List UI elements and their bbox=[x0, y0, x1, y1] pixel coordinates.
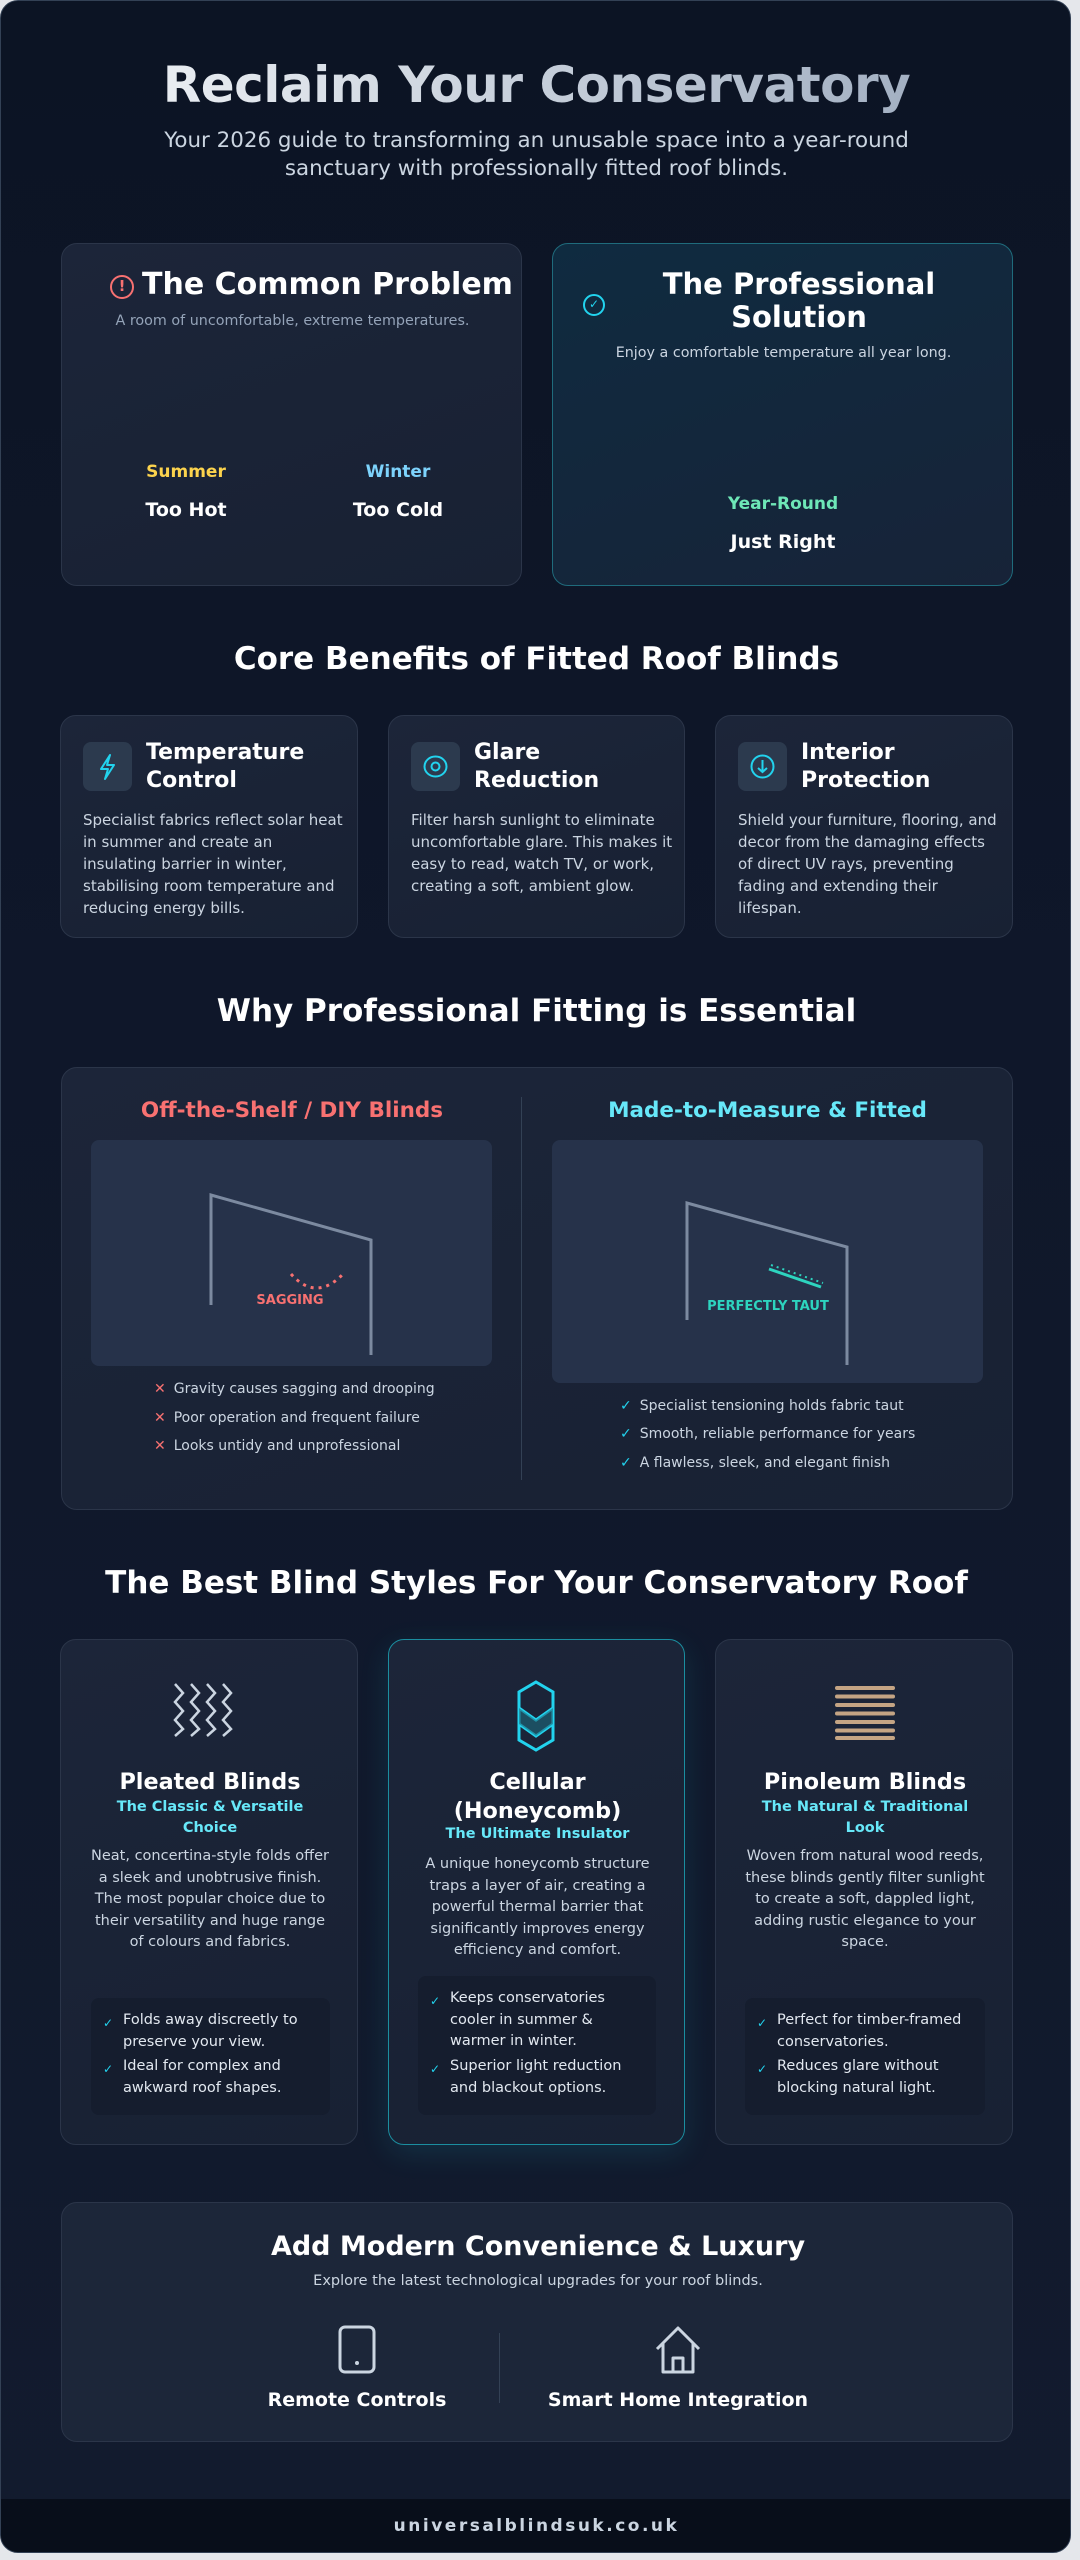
feature box bbox=[91, 1998, 330, 2115]
heading: best blind styles: The Best Blind Styles For Your Conservatory Roof bbox=[105, 1565, 968, 1601]
icon: check circle: ✓ bbox=[589, 297, 599, 311]
description: A unique honeycomb structure traps a layer of air, creating a powerful thermal barrier that significantly improves energy efficiency and comfort. bbox=[425, 1856, 650, 1958]
subtitle: Your 2026 guide to transforming an unusable space into a year-round sanctuary with professionally fitted roof blinds. bbox=[164, 128, 909, 181]
feature: remote controls: Remote Controls bbox=[268, 2389, 446, 2411]
feature box: Ideal for complex and awkward roof shapes. bbox=[123, 2058, 281, 2096]
list: fitted pros: ✓ Specialist tensioning holds fabric taut bbox=[620, 1398, 904, 1414]
feature box: ✓ bbox=[103, 2062, 113, 2076]
description: Shield your furniture, flooring, and decor from the damaging effects of direct UV rays, preventing fading and extending their lifespan. bbox=[738, 811, 997, 917]
diagram: taut: PERFECTLY TAUT bbox=[707, 1299, 829, 1314]
feature box: ✓ bbox=[430, 1994, 440, 2008]
title: Reclaim Your Conservatory bbox=[163, 56, 910, 114]
feature box: Superior light reduction and blackout options. bbox=[450, 2058, 621, 2096]
subtitle: The Classic & Versatile Choice bbox=[117, 1799, 303, 1836]
subtitle: Explore the latest technological upgrades for your roof blinds. bbox=[313, 2273, 763, 2289]
title: Glare bbox=[474, 740, 540, 765]
label: winter: Winter bbox=[366, 462, 430, 482]
feature box: ✓ bbox=[430, 2062, 440, 2076]
list: fitted pros bbox=[620, 1398, 915, 1471]
text: problem subtitle: A room of uncomfortable, extreme temperatures. bbox=[116, 313, 469, 329]
panel: modern convenience bbox=[61, 2202, 1013, 2442]
description: Neat, concertina-style folds offer a sleek and unobtrusive finish. The most popular choice due to their versatility and huge range of colours and fabrics. bbox=[91, 1848, 329, 1950]
text: solution subtitle: Enjoy a comfortable temperature all year long. bbox=[616, 345, 951, 361]
diagram: sagging: SAGGING bbox=[256, 1293, 324, 1308]
label: summer: Summer bbox=[146, 462, 226, 482]
diagram: sagging bbox=[91, 1140, 492, 1366]
feature box bbox=[418, 1976, 656, 2115]
feature box: ✓ bbox=[757, 2016, 767, 2030]
title: Protection bbox=[801, 768, 930, 793]
feature box bbox=[745, 1998, 985, 2115]
list: diy cons bbox=[154, 1381, 435, 1454]
icon: shield arrow bbox=[738, 742, 787, 791]
panel: pleated blinds bbox=[60, 1639, 358, 2145]
feature: remote controls bbox=[268, 2326, 446, 2411]
list: fitted pros: ✓ A flawless, sleek, and elegant finish bbox=[620, 1455, 890, 1471]
label: summer bbox=[145, 462, 227, 521]
feature box: Keeps conservatories cooler in summer & warmer in winter. bbox=[450, 1990, 605, 2049]
label: year-round bbox=[728, 494, 838, 553]
title bbox=[474, 740, 599, 793]
label: year-round: Just Right bbox=[731, 531, 835, 553]
diagram: taut bbox=[552, 1140, 983, 1383]
icon: house bbox=[656, 2326, 700, 2374]
list: diy cons: ✕ Gravity causes sagging and drooping bbox=[154, 1381, 435, 1397]
label: winter bbox=[352, 462, 443, 521]
heading: core benefits: Core Benefits of Fitted Roof Blinds bbox=[234, 641, 839, 677]
label: winter: Too Cold bbox=[353, 499, 443, 521]
heading: diy: Off-the-Shelf / DIY Blinds bbox=[141, 1098, 443, 1123]
heading: Add Modern Convenience & Luxury bbox=[271, 2231, 805, 2262]
panel: comparison bbox=[61, 1067, 1013, 1510]
list: diy cons: ✕ Poor operation and frequent failure bbox=[154, 1410, 420, 1426]
heading: common problem: ! bbox=[119, 277, 125, 295]
feature box: Folds away discreetly to preserve your view. bbox=[123, 2012, 298, 2050]
title: Pleated Blinds bbox=[119, 1769, 301, 1795]
title bbox=[146, 740, 304, 793]
feature box: Reduces glare without blocking natural light. bbox=[777, 2058, 939, 2096]
title: (Honeycomb) bbox=[454, 1798, 621, 1824]
panel: interior protection bbox=[715, 715, 1013, 938]
heading: solution: The Professional Solution bbox=[663, 267, 935, 334]
title: Pinoleum Blinds bbox=[764, 1769, 966, 1795]
feature box: Perfect for timber-framed conservatories. bbox=[777, 2012, 961, 2050]
footer: universalblindsuk.co.uk bbox=[394, 2516, 679, 2536]
description: Specialist fabrics reflect solar heat in summer and create an insulating barrier in winter, stabilising room temperature and reducing energy bills. bbox=[83, 811, 343, 917]
icon: pleats bbox=[173, 1683, 233, 1737]
panel: common problem bbox=[61, 243, 522, 586]
subtitle: The Natural & Traditional Look bbox=[762, 1799, 968, 1836]
title bbox=[454, 1769, 621, 1824]
title bbox=[801, 740, 930, 793]
label: year-round: Year-Round bbox=[728, 494, 838, 514]
list: diy cons: ✕ Looks untidy and unprofessional bbox=[154, 1438, 400, 1454]
title: Control bbox=[146, 768, 237, 793]
feature box: ✓ bbox=[757, 2062, 767, 2076]
title bbox=[1, 52, 1072, 118]
panel: temperature control bbox=[60, 715, 358, 938]
feature: smart home: Smart Home Integration bbox=[548, 2389, 808, 2411]
description: Filter harsh sunlight to eliminate uncomfortable glare. This makes it easy to read, watch TV, or work, creating a soft, ambient glow. bbox=[411, 811, 672, 895]
heading: why professional fitting: Why Professional Fitting is Essential bbox=[217, 993, 856, 1029]
icon: lightning bbox=[83, 742, 132, 791]
footer bbox=[1, 2499, 1072, 2555]
description: Woven from natural wood reeds, these blinds gently filter sunlight to create a soft, dappled light, adding rustic elegance to your space. bbox=[745, 1848, 985, 1950]
icon: wood slats bbox=[835, 1686, 895, 1740]
icon: honeycomb bbox=[518, 1680, 554, 1752]
panel: professional solution bbox=[552, 243, 1013, 586]
panel: glare reduction bbox=[388, 715, 685, 938]
title: Temperature bbox=[146, 740, 304, 765]
list: fitted pros: ✓ Smooth, reliable performance for years bbox=[620, 1426, 915, 1442]
heading: fitted: Made-to-Measure & Fitted bbox=[608, 1098, 927, 1123]
title: Cellular bbox=[489, 1769, 586, 1795]
icon: eye bbox=[411, 742, 460, 791]
icon: check circle bbox=[583, 294, 605, 316]
feature box: ✓ bbox=[103, 2016, 113, 2030]
feature: smart home bbox=[548, 2326, 808, 2411]
title: Interior bbox=[801, 740, 895, 765]
subtitle: The Ultimate Insulator bbox=[446, 1826, 629, 1842]
heading: common problem: The Common Problem bbox=[142, 267, 513, 302]
title: Reduction bbox=[474, 768, 599, 793]
panel: cellular blinds bbox=[388, 1639, 685, 2145]
icon: phone bbox=[338, 2326, 376, 2374]
label: summer: Too Hot bbox=[145, 499, 227, 521]
panel: pinoleum blinds bbox=[715, 1639, 1013, 2145]
